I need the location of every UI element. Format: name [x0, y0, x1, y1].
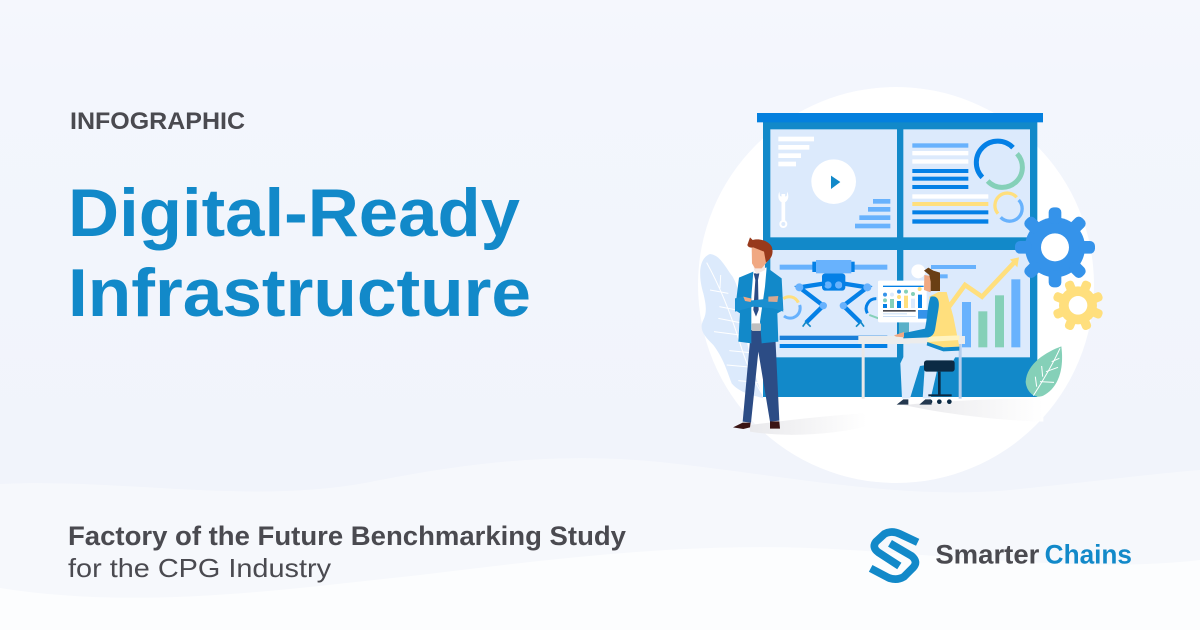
floor shadow: man [750, 413, 867, 435]
floor shadow: worker [903, 398, 1043, 422]
icon: large gear [1015, 207, 1095, 287]
background wave: back [0, 458, 1200, 630]
illustration circle [698, 87, 1094, 483]
logo wordmark: Chains [1045, 539, 1132, 569]
arrow: growth trend [947, 257, 1019, 310]
small donut chart [995, 193, 1022, 221]
donut chart [976, 141, 1022, 187]
bar chart [913, 279, 1020, 348]
monitor stand [899, 322, 909, 335]
neck and face [753, 262, 765, 274]
logo wordmark [935, 539, 1132, 569]
shirt [751, 267, 767, 327]
monitor dashboard [878, 281, 928, 322]
crossed arm [735, 297, 783, 312]
illustration lower part [700, 207, 1104, 435]
title: Infrastructure [68, 255, 531, 331]
illustration upper part [757, 113, 1043, 397]
leaf: right [1026, 346, 1062, 397]
tie [753, 273, 759, 317]
man standing [733, 237, 783, 429]
background wave: front [0, 547, 1200, 630]
panel: robot arm [770, 250, 897, 357]
screen frame [763, 120, 1037, 397]
hair [747, 237, 773, 263]
shoes [733, 423, 751, 429]
panel: growth chart [903, 250, 1030, 357]
screen top bar [757, 113, 1043, 122]
jacket [735, 267, 783, 343]
logo mark [871, 532, 918, 579]
icon: wrench [778, 192, 788, 227]
arm [903, 296, 939, 338]
subtitle [68, 521, 626, 583]
belt [752, 323, 761, 331]
trousers [743, 330, 779, 423]
desk and worker [858, 268, 965, 405]
title: Digital-Ready [68, 175, 520, 251]
panel: video [770, 129, 897, 237]
logo [871, 532, 1132, 579]
desk top [858, 336, 965, 344]
title [68, 175, 531, 331]
logo wordmark: Smarter [935, 539, 1040, 569]
label: infographic: INFOGRAPHIC [70, 108, 245, 135]
leaf: left [700, 254, 763, 398]
head and hair [924, 275, 931, 292]
vest [927, 292, 959, 347]
desk legs [862, 343, 962, 399]
icon: play button [811, 159, 856, 204]
worker legs [900, 343, 958, 398]
shoes [897, 399, 908, 405]
panel: dashboards [903, 129, 1030, 237]
icon: small gear [1052, 280, 1104, 331]
subtitle: Factory of the Future Benchmarking Study [68, 521, 626, 551]
subtitle: for the CPG Industry [68, 553, 331, 583]
stool [924, 360, 955, 404]
